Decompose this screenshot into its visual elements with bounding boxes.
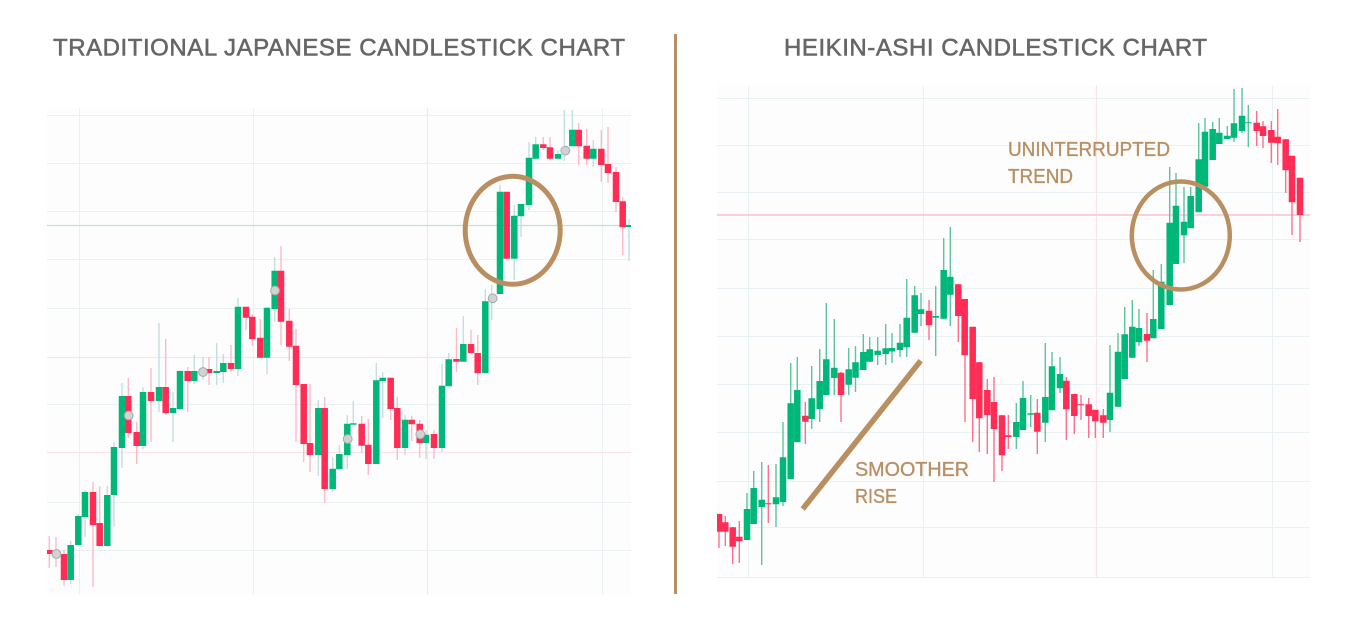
panel: traditional candlestick chart [47, 108, 631, 595]
candle bodies: traditional [49, 130, 629, 580]
label: smoother rise [855, 458, 969, 508]
center divider [674, 34, 677, 594]
title: traditional chart: TRADITIONAL JAPANESE CANDLESTICK CHART [53, 34, 625, 62]
arrow line: smoother rise [803, 361, 921, 509]
label: smoother rise: RISE [855, 485, 897, 508]
candle wicks: heikin-ashi [719, 88, 1300, 565]
gray event markers [52, 146, 570, 558]
title: heikin-ashi chart: HEIKIN-ASHI CANDLESTICK CHART [784, 34, 1207, 62]
candle bodies: heikin-ashi [719, 116, 1300, 547]
panel: heikin-ashi candlestick chart [717, 85, 1310, 578]
label: smoother rise: SMOOTHER [855, 458, 969, 481]
label: uninterrupted trend: UNINTERRUPTED [1008, 138, 1170, 161]
callout circle: interrupted candles [465, 176, 560, 284]
callout circle: uninterrupted trend [1132, 182, 1230, 290]
label: uninterrupted trend [1008, 138, 1170, 188]
candle wicks: traditional [49, 110, 629, 587]
label: uninterrupted trend: TREND [1008, 165, 1073, 188]
